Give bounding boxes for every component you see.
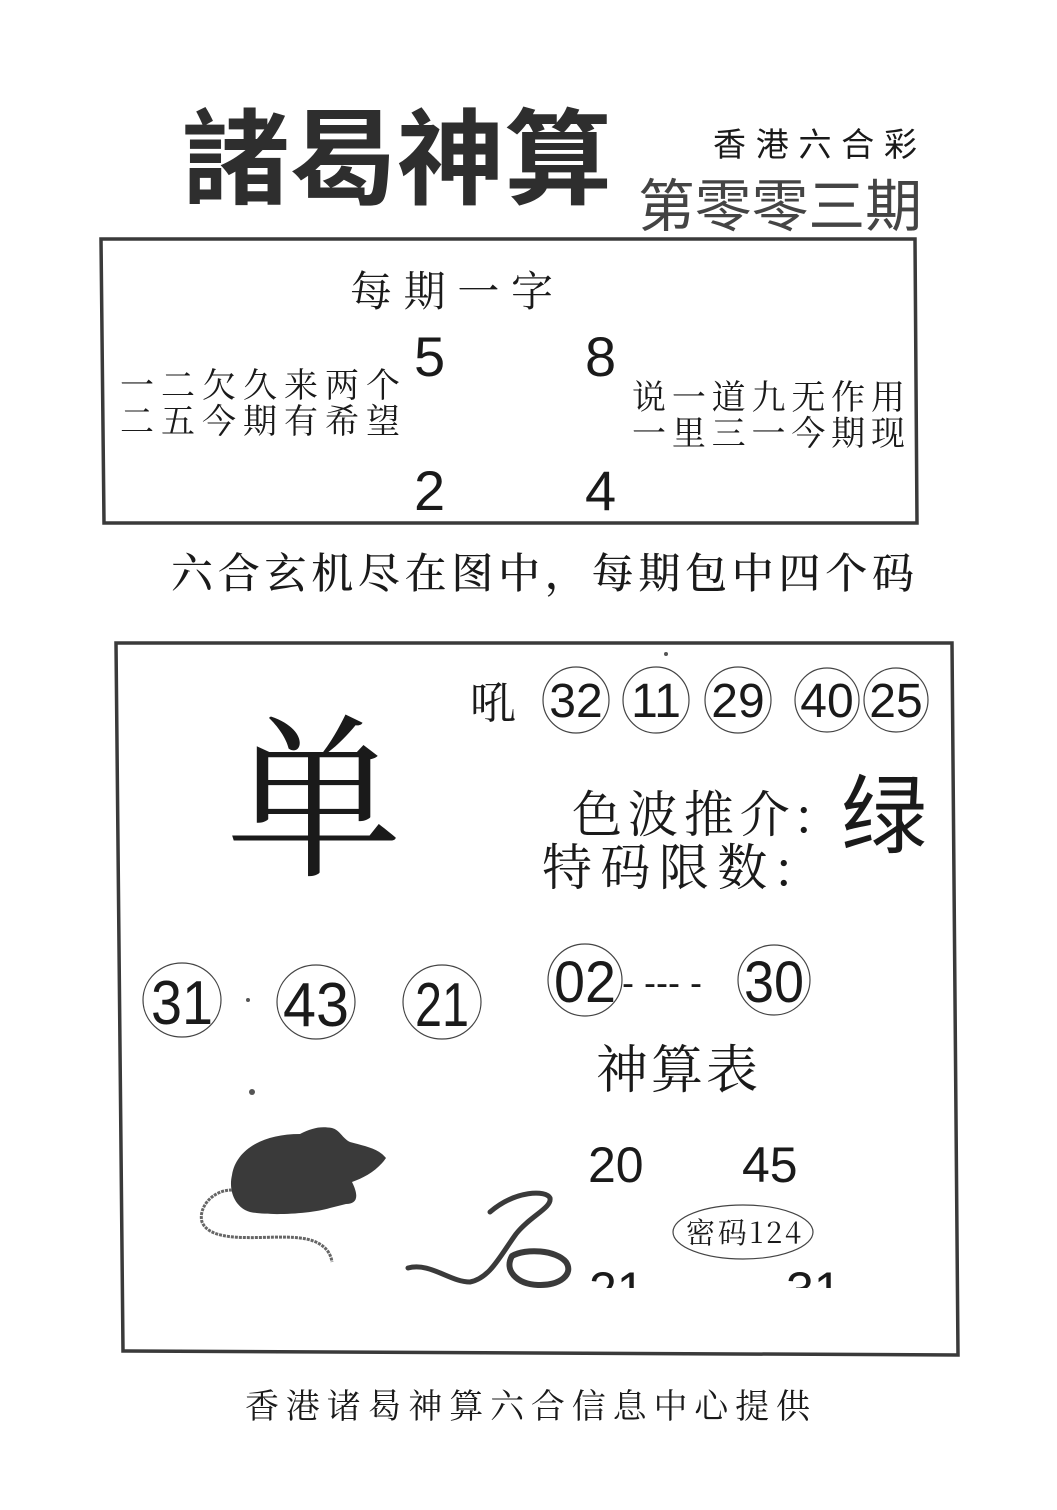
- table heading: 神算表: [596, 1028, 758, 1103]
- clipped table numbers: 31: [786, 1262, 842, 1318]
- right verse: [632, 370, 905, 455]
- number range: 30: [744, 950, 804, 1015]
- circled numbers row: 40: [800, 675, 854, 728]
- password oval: 密码124: [686, 1211, 801, 1252]
- password oval: [673, 1205, 813, 1259]
- large character 单: 单: [226, 660, 402, 913]
- left verse: 二五今期有希望: [120, 394, 400, 443]
- circled numbers row: 25: [869, 675, 923, 728]
- number 5: 5: [414, 325, 445, 388]
- circled numbers left: 31: [151, 969, 213, 1038]
- left verse: 一二欠久来两个: [120, 358, 400, 407]
- icon: rat: [201, 1127, 386, 1262]
- circled numbers left: 43: [283, 971, 349, 1040]
- right verse: 一里三一今期现: [632, 406, 905, 455]
- colour value: 绿: [841, 746, 927, 871]
- panel heading: 每期一字: [350, 259, 553, 319]
- caption: 六合玄机尽在图中，每期包中四个码: [171, 541, 914, 601]
- number 2: 2: [414, 459, 445, 522]
- footer: 香港诸曷神算六合信息中心提供: [245, 1379, 811, 1428]
- right verse: 说一道九无作用: [632, 370, 905, 419]
- left verse: [120, 358, 400, 443]
- icon: snake: [408, 1193, 568, 1285]
- issue number: 第零零三期: [638, 161, 922, 243]
- circled numbers row: [543, 667, 928, 733]
- number 8: 8: [585, 325, 616, 388]
- number range: 02: [554, 950, 616, 1015]
- table numbers: 20: [588, 1137, 644, 1193]
- subtitle: lottery name: 香港六合彩: [713, 118, 917, 166]
- number 4: 4: [585, 459, 616, 522]
- specks: [246, 652, 668, 1095]
- panel: bottom box: [116, 643, 958, 1355]
- special number limit label: 特码限数:: [542, 828, 792, 900]
- clipped table numbers: [589, 1262, 842, 1318]
- colour wave label: 色波推介:: [572, 775, 812, 847]
- circled numbers left: 21: [415, 971, 469, 1040]
- table numbers: 45: [742, 1137, 798, 1193]
- circled numbers left: [143, 963, 481, 1040]
- number range: [548, 944, 810, 1016]
- circled numbers row: 29: [711, 675, 765, 728]
- panel: top box: [101, 239, 917, 523]
- number range: - --- -: [622, 962, 702, 1003]
- table numbers: [588, 1137, 798, 1193]
- circled numbers row: 11: [631, 675, 681, 728]
- clipped table numbers: 21: [589, 1262, 645, 1318]
- title: 諸曷神算: [182, 75, 612, 226]
- circled numbers row: 32: [549, 675, 603, 728]
- label: 吼: 吼: [470, 667, 516, 731]
